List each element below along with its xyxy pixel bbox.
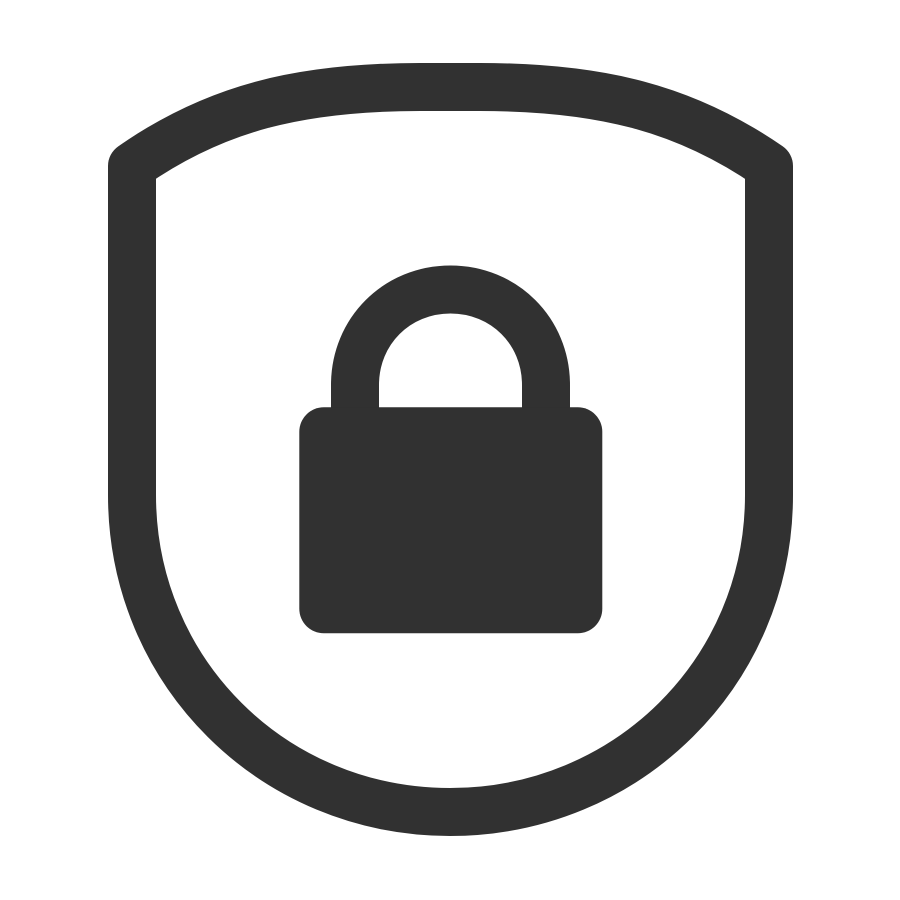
padlock shackle — [355, 290, 546, 420]
padlock body — [299, 407, 602, 633]
shield outline — [132, 87, 769, 812]
padlock — [299, 290, 602, 633]
